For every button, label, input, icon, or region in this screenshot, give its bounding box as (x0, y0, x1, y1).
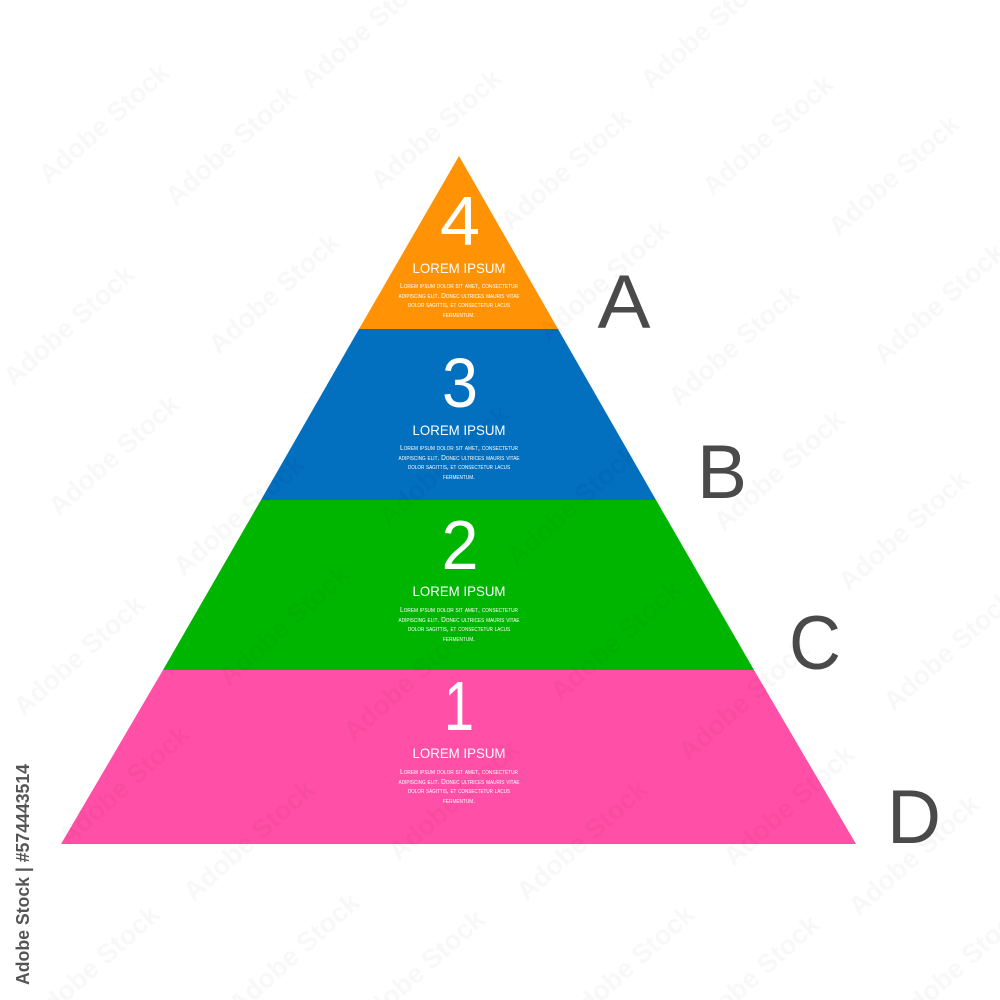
watermarks: Adobe Stock (533, 213, 676, 347)
tier 3: blue (261, 329, 656, 500)
tier 2: green: fermentum. (443, 636, 475, 643)
tier 4: orange (359, 156, 558, 329)
watermarks: Adobe Stock (708, 403, 851, 537)
tier 1: pink: Lorem ipsum dolor sit amet, consectetur (400, 769, 518, 776)
pyramid chart (61, 156, 856, 844)
watermarks: Adobe Stock (8, 588, 151, 722)
watermarks: Adobe Stock (823, 108, 966, 242)
tier 4: orange: 4 (440, 182, 480, 260)
label D: D (887, 775, 941, 860)
tier 3: blue: adipiscing elit. Donec ultrices mauris vitae (398, 455, 520, 462)
watermarks: Adobe Stock (338, 613, 481, 747)
watermarks: Adobe Stock (213, 558, 356, 692)
label A: A (598, 260, 651, 345)
tier 2: green: dolor sagittis, et consectetur lacus (408, 626, 511, 633)
tier 2: green (163, 500, 754, 670)
watermarks: Adobe Stock (373, 398, 516, 532)
watermarks: Adobe Stock (833, 463, 976, 597)
watermarks: Adobe Stock (843, 788, 986, 922)
tier 4: orange: fermentum. (443, 312, 475, 319)
watermarks: Adobe Stock (203, 226, 346, 360)
watermarks: Adobe Stock (160, 78, 303, 212)
tier 4: orange: LOREM IPSUM (412, 260, 506, 276)
tier 4: orange: Lorem ipsum dolor sit amet, consectetur (400, 283, 518, 290)
tier 4: orange: dolor sagittis, et consectetur lacus (408, 302, 511, 309)
watermarks: Adobe Stock (501, 438, 644, 572)
watermarks: Adobe Stock (0, 258, 141, 392)
tier 1: pink (61, 667, 856, 844)
tier 3: blue: dolor sagittis, et consectetur lacus (408, 464, 511, 471)
watermarks: Adobe Stock (718, 738, 861, 872)
watermarks: Adobe Stock (663, 278, 806, 412)
label B: B (697, 430, 747, 515)
tier 3: blue: LOREM IPSUM (412, 422, 506, 438)
watermarks: Adobe Stock (511, 773, 654, 907)
watermarks: Adobe Stock (33, 56, 176, 190)
watermarks: Adobe Stock (383, 733, 526, 867)
watermarks: Adobe Stock (53, 718, 196, 852)
watermarks: Adobe Stock (673, 633, 816, 767)
tier 1: pink: LOREM IPSUM (412, 745, 506, 761)
watermarks: Adobe Stock (545, 573, 688, 707)
tier 1: pink: 1 (444, 667, 474, 745)
watermarks: Adobe Stock (495, 102, 638, 236)
tier 1: pink: fermentum. (443, 798, 475, 805)
watermarks: Adobe Stock (168, 448, 311, 582)
tier 1: pink: dolor sagittis, et consectetur lacus (408, 788, 511, 795)
stock id text: Adobe Stock | #574443514 (12, 763, 33, 985)
tier 3: blue: 3 (442, 344, 478, 422)
watermarks: Adobe Stock (43, 388, 186, 522)
watermarks: Adobe Stock (178, 773, 321, 907)
tier 2: green: 2 (442, 506, 478, 584)
watermarks: Adobe Stock (365, 62, 508, 196)
watermarks: Adobe Stock (697, 68, 840, 202)
label C: C (789, 601, 841, 686)
tier 3: blue: Lorem ipsum dolor sit amet, consectetur (400, 445, 518, 452)
tier 2: green: adipiscing elit. Donec ultrices mauris vitae (398, 617, 520, 624)
tier 3: blue: fermentum. (443, 474, 475, 481)
tier 2: green: LOREM IPSUM (412, 583, 506, 599)
tier 2: green: Lorem ipsum dolor sit amet, consectetur (400, 607, 518, 614)
tier 1: pink: adipiscing elit. Donec ultrices mauris vitae (398, 779, 520, 786)
tier 4: orange: adipiscing elit. Donec ultrices mauris vitae (398, 293, 520, 300)
